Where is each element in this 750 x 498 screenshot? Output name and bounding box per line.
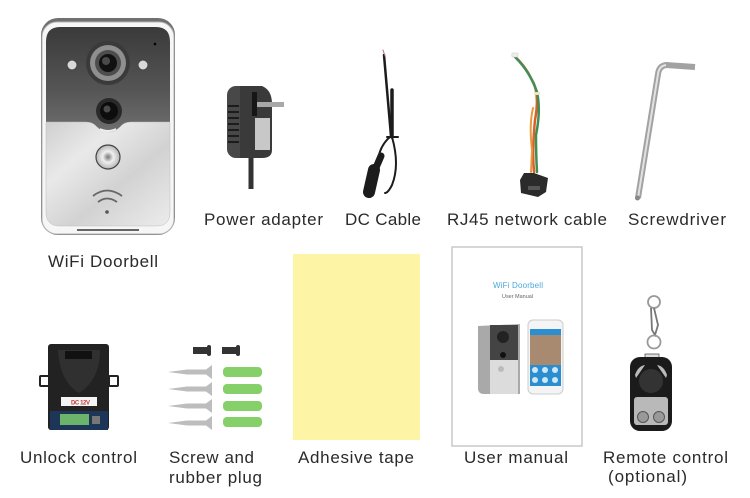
label: RJ45 network cable: RJ45 network cable	[447, 210, 607, 229]
icon: green plugs	[223, 367, 262, 427]
icon: unlock control	[40, 344, 118, 430]
label: User manual: User manual	[464, 448, 568, 467]
label: Screw and rubber plug: Screw and	[169, 448, 254, 467]
icon: manual doorbell photo	[478, 324, 520, 394]
label: DC Cable: DC Cable	[345, 210, 421, 229]
label: Power adapter: Power adapter	[204, 210, 323, 229]
label: Remote control (optional)	[603, 448, 728, 486]
manual title: WiFi Doorbell	[493, 281, 543, 290]
panel: user manual	[452, 247, 582, 446]
icon: DC cable	[369, 50, 398, 193]
icon: manual smartphone	[528, 320, 563, 394]
icon: screws	[168, 365, 212, 430]
icon: RJ45 network cable	[512, 53, 548, 197]
icon: remote control	[630, 296, 672, 431]
label: Remote control (optional): Remote control	[603, 448, 728, 467]
manual subtitle: User Manual	[502, 294, 533, 300]
label: Unlock control: Unlock control	[20, 448, 137, 467]
icon: screws and rubber plugs	[168, 345, 262, 430]
label: Screw and rubber plug: rubber plug	[169, 468, 262, 487]
panel: adhesive tape	[293, 254, 420, 440]
label: Screwdriver: Screwdriver	[628, 210, 726, 229]
icon: WiFi doorbell	[41, 18, 175, 235]
icon: screwdriver	[635, 65, 695, 200]
icon: power adapter	[227, 86, 284, 189]
icon: unlock control: DC 12V	[71, 400, 90, 406]
icon: black rubber bolts	[193, 345, 240, 356]
label: Adhesive tape: Adhesive tape	[298, 448, 414, 467]
label: WiFi Doorbell: WiFi Doorbell	[48, 252, 158, 271]
label: Screw and rubber plug	[169, 448, 262, 487]
label: Remote control (optional): (optional)	[608, 467, 687, 486]
